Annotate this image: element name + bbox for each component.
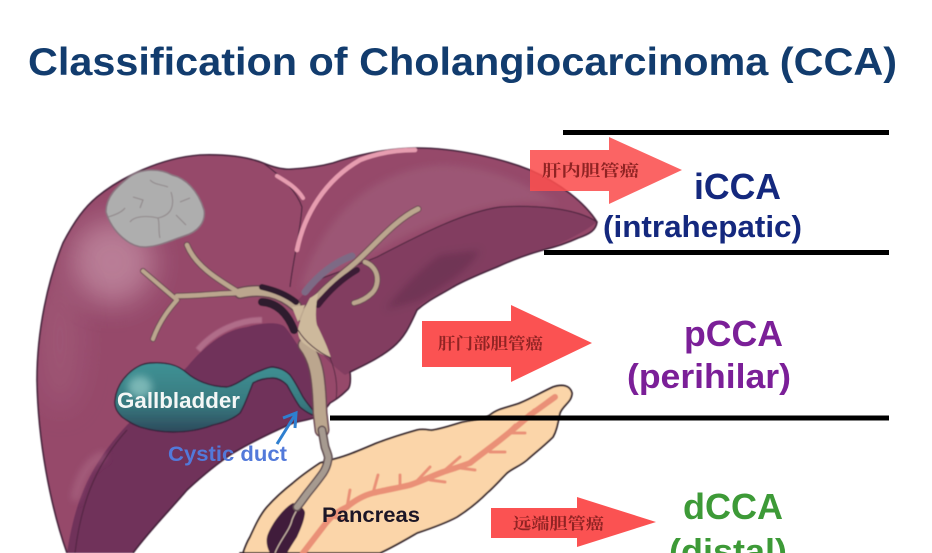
title: Classification of Cholangiocarcinoma (CCA) [28, 41, 897, 84]
label: 远端胆管癌: 远端胆管癌 [513, 514, 604, 533]
tumour [106, 170, 204, 247]
label: Cystic duct: Cystic duct [168, 443, 287, 466]
liver illustration [36, 148, 597, 553]
hilum confluence [292, 293, 331, 358]
label: iCCA: iCCA [694, 166, 781, 207]
arrow: cystic duct pointer [277, 413, 296, 444]
label: pCCA: (perihilar) [627, 358, 791, 396]
divider lines [330, 130, 889, 420]
label: iCCA: (intrahepatic) [603, 209, 802, 244]
label: dCCA [669, 486, 787, 553]
liver outline [37, 148, 597, 553]
liver shading [70, 220, 154, 304]
label: pCCA: pCCA [684, 313, 783, 354]
label: iCCA [603, 166, 802, 244]
label: 肝门部胆管癌: 肝门部胆管癌 [438, 334, 543, 353]
label: Pancreas: Pancreas [322, 504, 420, 527]
arrow: intrahepatic [530, 137, 682, 204]
distal bile duct [297, 430, 328, 507]
bile ducts [143, 209, 418, 430]
falciform ligament [277, 150, 415, 250]
liver body [37, 148, 597, 553]
pancreas [240, 385, 572, 553]
gallbladder [115, 363, 318, 432]
arrow: distal [491, 497, 656, 547]
ampulla [267, 503, 305, 553]
pancreatic duct [303, 397, 555, 553]
label: pCCA [627, 313, 791, 396]
right lobe underside [298, 206, 597, 375]
arrow: perihilar [422, 305, 592, 382]
label: dCCA: dCCA [683, 486, 783, 527]
label: Gallbladder: Gallbladder [117, 388, 240, 413]
label: 肝内胆管癌: 肝内胆管癌 [542, 161, 639, 180]
dark underside of left lobe [67, 323, 318, 553]
